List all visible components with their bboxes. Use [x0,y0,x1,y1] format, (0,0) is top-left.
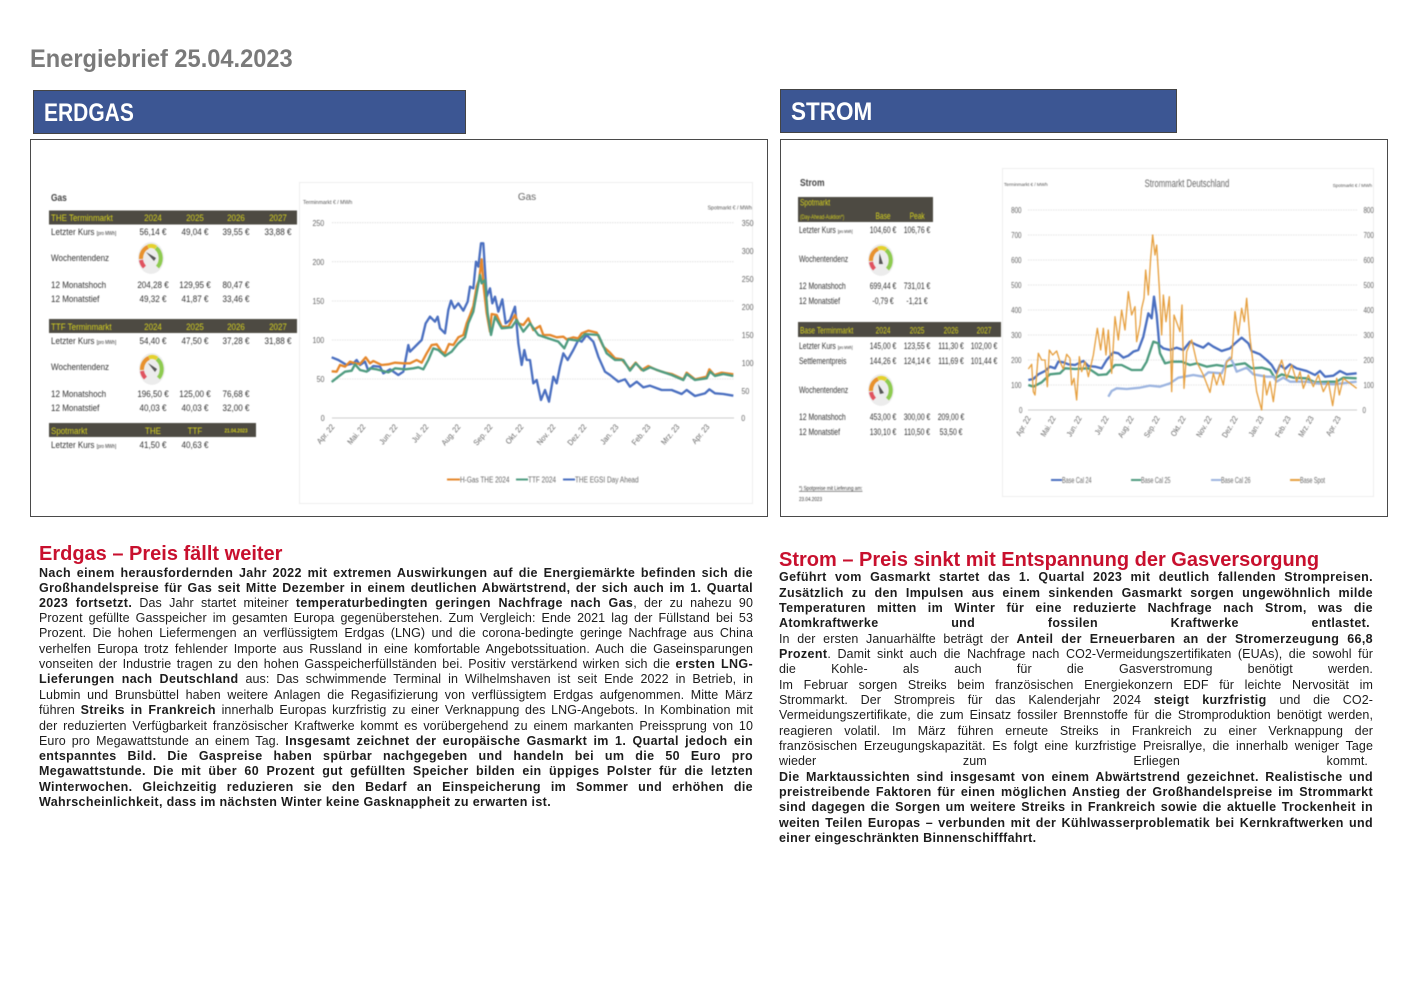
axis labels: 200 [742,303,754,312]
rows: Spotmarkt: 106,76 € [904,225,931,235]
table header: Base Terminmarkt: 2024 [876,325,891,336]
table header: Spotmarkt: (Day-Ahead-Auktion*) [800,214,844,221]
text block: Strom: französischen Erzeugungskapazität. Es folgt eine kurzfristige Preisrallye, die innerhalb weniger Tage [779,739,1373,753]
rows: Base Terminmarkt: Wochentendenz [799,385,848,395]
rows: THE: 39,55 € [223,226,250,237]
axis labels: Nov. 22 [535,422,558,447]
table header: Base Terminmarkt: 2025 [910,325,925,336]
text block: Erdgas: Großhandelspreise für Gas seit Mitte Dezember in einem deutlichen Abwärtstrend, der sich auch im 1. Quartal [39,581,753,595]
line chart: Gas: Gas [518,192,536,203]
icon: gauge Base [868,374,894,406]
footnote: 23.04.2023 [799,497,822,503]
rows: Spotmarkt: -0,79 € [872,296,894,306]
axis labels: 100 [1011,381,1022,390]
rows: Base Terminmarkt: 130,10 € [870,427,897,437]
rows: TTF: 12 Monatshoch [51,388,106,399]
rows: Spotmarkt [51,439,209,450]
table header: TTF Terminmarkt [49,319,297,333]
axis labels: 250 [312,219,324,228]
rows: Spotmarkt: 40,63 € [182,439,209,450]
table header: THE Terminmarkt: 2024 [144,212,162,223]
rows: Spotmarkt: Wochentendenz [799,254,848,264]
rows: TTF: 12 Monatstief [51,402,100,413]
footnote [799,486,862,503]
axis labels: Jul. 22 [1092,414,1111,436]
rows: TTF: 32,00 € [223,402,250,413]
table: Strom: Strom [800,177,825,188]
legend: Strom [1051,477,1325,485]
rows: TTF: 40,03 € [182,402,209,413]
axis labels: 800 [1363,206,1374,215]
rows: TTF: 47,50 € [182,335,209,346]
axis labels [312,219,754,447]
rows: THE: 56,14 € [140,226,167,237]
axis labels: Apr. 22 [1014,414,1033,438]
text block: Strom: In der ersten Januarhälfte beträgt der Anteil der Erneuerbaren an der Stromerzeugung 66,8 [779,632,1373,646]
axis labels: Sep. 22 [471,422,495,447]
axis labels: Apr. 23 [1324,414,1343,438]
rows: THE: 33,46 € [223,293,250,304]
text block: Strom: Strommarkt. Der Strompreis für das Kalenderjahr 2024 steigt kurzfristig und die CO2- [779,693,1373,707]
axis labels: 50 [317,375,324,384]
legend: Gas: TTF 2024 [528,475,556,485]
line chart: Gas [300,182,754,504]
text block: Erdgas: Prozent. Die hohen Liefermengen an verflüssigtem Erdgas (LNG) und die corona-bedingte geringe Nachfrage aus China [39,626,753,640]
legend: Gas: THE EGSI Day Ahead [575,475,639,485]
text block: Erdgas: Lubmin und Brunsbüttel haben weitere Anlagen die Regasifizierung von verflüssigtem Erdgas aufgenommen. Mitte März [39,688,753,702]
heading: Erdgas: Erdgas – Preis fällt weiter [39,543,282,565]
axis labels: 400 [1363,306,1374,315]
rows: Spotmarkt: -1,21 € [906,296,928,306]
rows: Spotmarkt: 731,01 € [904,281,931,291]
table header: Base Terminmarkt: 2026 [944,325,959,336]
text block: Erdgas: Nach einem herausfordernden Jahr 2022 mit extremen Auswirkungen auf die Energiemärkte befinden sich die [39,566,753,580]
rows: THE: 49,32 € [140,293,167,304]
table header: Spotmarkt: THE [145,425,161,436]
axis labels: Mrz. 23 [1296,414,1316,439]
axis labels: Mai. 22 [345,422,368,446]
axis labels: 100 [742,359,754,368]
legend: Strom: Base Cal 26 [1221,477,1251,485]
rows: THE: 49,04 € [182,226,209,237]
line chart: Gas: Terminmarkt € / MWh [303,200,352,206]
axis labels: 400 [1011,306,1022,315]
axis labels: 0 [321,414,325,423]
axis labels: Jun. 22 [377,422,400,446]
text block: Erdgas: entspanntes Bild. Die Gaspreise haben spürbar nachgegeben und handeln bei um die 50 Euro pro [39,749,753,763]
axis labels: Dez. 22 [565,422,589,447]
axis labels: 250 [742,275,754,284]
table: Strom [798,177,1001,503]
axis labels: 600 [1363,256,1374,265]
rows: TTF: Wochentendenz [51,361,109,372]
text block: Strom: sind dagegen die Sorgen um weitere Streiks in Frankreich sowie die aktuelle Trockenheit in [779,800,1373,814]
rows: THE: 129,95 € [179,279,211,290]
table header: Base Terminmarkt: 2027 [977,325,992,336]
text block: Strom: Zusätzlich zu den Impulsen aus einem sinkenden Gasmarkt sorgen ungewöhnlich milde [779,586,1373,600]
icon: gauge TTF [139,353,165,385]
rows: THE: 12 Monatstief [51,293,100,304]
line chart: Gas: Spotmarkt € / MWh [708,206,752,212]
text block: Erdgas: der reduzierten Verfügbarkeit französischer Kraftwerke kommt es vorübergehend zu einem markanten Preissprung von 10 [39,719,753,733]
axis labels: Apr. 22 [315,422,337,446]
text block: Erdgas [39,566,753,809]
rows: Base Terminmarkt: 12 Monatstief [799,427,841,437]
axis labels: Jul. 22 [410,422,431,445]
rows: TTF: 37,28 € [223,335,250,346]
text block: Erdgas: führen Streiks in Frankreich innerhalb Europas kurzfristig zu einer Verknappung des LNG-Angebots. In Kombination mit [39,703,753,717]
axis labels: 300 [742,247,754,256]
rows: Base Terminmarkt: 144,26 € [870,356,897,366]
legend: Gas: H-Gas THE 2024 [460,475,509,485]
rows: Spotmarkt: 104,60 € [870,225,897,235]
axis labels: 800 [1011,206,1022,215]
icon: gauge THE [138,242,164,274]
rows: THE [51,226,292,304]
table header: THE Terminmarkt: 2027 [269,212,287,223]
table header: THE Terminmarkt: 2025 [186,212,204,223]
table: Gas [49,192,297,450]
text block: Strom: Die Marktaussichten sind insgesamt von einem Abwärtstrend gezeichnet. Realistische und [779,770,1373,784]
data lines: Strom [1028,235,1357,410]
footnote: *) Spotpreise mit Lieferung am: [799,486,862,492]
rows: Base Terminmarkt: 124,14 € [904,356,931,366]
text block: Erdgas: verhelfen Europa trotz fehlender Importe aus Russland in eine komfortable Angebotssituation. Auch die Gaseinsparungen [39,642,753,656]
text block: Strom: wieder zum Erliegen kommt. [779,754,1368,768]
rows: Spotmarkt: 41,50 € [140,439,167,450]
axis labels: 0 [1019,406,1023,415]
table header: TTF Terminmarkt: 2024 [144,321,162,332]
axis labels: 600 [1011,256,1022,265]
axis labels: 150 [742,331,754,340]
axis labels: Aug. 22 [439,422,463,447]
axis labels: 200 [1011,356,1022,365]
rows: TTF: 31,88 € [265,335,292,346]
axis labels: 100 [312,336,324,345]
axis labels: Nov. 22 [1194,414,1214,439]
axis labels: Jan. 23 [598,422,621,446]
rows: Base Terminmarkt: 145,00 € [870,341,897,351]
text block: Erdgas: Megawattstunde. Die mit über 60 Prozent gut gefüllten Speicher bilden ein üppiges Polster für die letzten [39,764,753,778]
panel: Strom data [780,139,1388,517]
rows: TTF: 76,68 € [223,388,250,399]
axis labels: 100 [1363,381,1374,390]
text block: Strom: Temperaturen mitten im Winter für eine reduzierte Nachfrage nach Strom, was die [779,601,1373,615]
rows: Base Terminmarkt: 300,00 € [904,412,931,422]
axis labels: 700 [1363,231,1374,240]
text block: Strom: Geführt vom Gasmarkt startet das 1. Quartal 2023 mit deutlich fallenden Strompreisen. [779,570,1373,584]
rows: Spotmarkt: Letzter Kurs [pro MWh] [51,439,116,450]
line chart: Strom: Spotmarkt € / MWh [1333,183,1372,188]
axis labels: 700 [1011,231,1022,240]
axis labels: Feb. 23 [1273,414,1293,439]
table header: THE Terminmarkt [49,210,297,224]
text block: Erdgas: vonseiten der Industrie tragen zu den hohen Gasspeicherfüllständen bei. Positiv verstärkend wirken sich die ersten LNG- [39,657,753,671]
text block: Strom: reagieren volatil. Im März führen erneute Streiks in Frankreich zu einer Verknappung der [779,724,1373,738]
table header: Base Terminmarkt: Base Terminmarkt [800,325,854,336]
line chart: Strom: Terminmarkt € / MWh [1004,182,1048,187]
axis labels: 50 [742,387,749,396]
axis labels: Aug. 22 [1116,414,1136,439]
rows: Spotmarkt: 699,44 € [870,281,897,291]
axis labels: Dez. 22 [1220,414,1240,439]
text block: Strom: die Kohle- als auch für die Gasverstromung benötigt werden. [779,662,1373,676]
table header: TTF Terminmarkt: 2026 [227,321,245,332]
text block: Erdgas: Winterwochen. Gleichzeitig reduzieren sie den Bedarf an Einspeicherung im Sommer und erhöhen die [39,780,753,794]
text block: Strom: preistreibende Faktoren für einen möglichen Anstieg der Großhandelspreise im Strommarkt [779,785,1373,799]
rows: TTF: 196,50 € [137,388,169,399]
rows: TTF: 54,40 € [140,335,167,346]
legend: Gas [447,475,639,485]
rows: THE: 12 Monatshoch [51,279,106,290]
rows: Base Terminmarkt [799,341,998,437]
axis labels: Jun. 22 [1064,414,1084,438]
rows: Spotmarkt: 12 Monatshoch [799,281,846,291]
rows: TTF: 40,03 € [140,402,167,413]
table header: Spotmarkt: Spotmarkt [800,197,831,208]
rows: TTF [51,335,292,413]
axis labels: Okt. 22 [1169,414,1188,438]
table header: TTF Terminmarkt: 2025 [186,321,204,332]
data lines: Gas [332,243,733,402]
axis labels: Feb. 23 [630,422,653,447]
rows: Base Terminmarkt: Letzter Kurs [pro MWh] [799,341,853,351]
text block: Erdgas: Prozent gefüllte Gasspeicher im gesamten Europa gegenüberstehen. Zum Vergleich: Ende 2021 lag der Füllstand bei 53 [39,611,753,625]
axis labels: 0 [1362,406,1366,415]
legend: Strom: Base Cal 25 [1141,477,1171,485]
rows: THE: Letzter Kurs [pro MWh] [51,226,116,237]
rows: Base Terminmarkt: Settlementpreis [799,356,846,366]
table header: TTF Terminmarkt: 2027 [269,321,287,332]
axis labels: Apr. 23 [690,422,712,446]
text block: Strom: Atomkraftwerke und fossilen Kraftwerke entlastet. [779,616,1370,630]
rows: Base Terminmarkt: 12 Monatshoch [799,412,846,422]
banner: Erdgas [33,90,466,134]
rows: Base Terminmarkt: 110,50 € [904,427,930,437]
axis labels: 200 [1363,356,1374,365]
rows: THE: 41,87 € [182,293,209,304]
rows: Base Terminmarkt: 53,50 € [940,427,963,437]
heading: Strom: Strom – Preis sinkt mit Entspannung der Gasversorgung [779,549,1319,571]
text block: Erdgas: Euro pro Megawattstunde an einem Tag. Insgesamt zeichnet der europäische Gasmarkt im 1. Quartal jedoch ein [39,734,753,748]
axis labels: Mai. 22 [1038,414,1058,438]
rows: Base Terminmarkt: 102,00 € [971,341,998,351]
table header: Spotmarkt: Base [876,211,891,221]
rows: THE: 80,47 € [223,279,250,290]
table header: Base Terminmarkt [798,322,1001,337]
banner: Erdgas: ERDGAS [44,99,134,127]
rows: Base Terminmarkt: 101,44 € [971,356,998,366]
rows: THE: Wochentendenz [51,252,109,263]
axis labels: 0 [741,414,745,423]
text block: Erdgas: 2023 fortsetzt. Das Jahr startet miteiner temperaturbedingten geringen Nachfrage nach Gas, der zu nahezu 90 [39,596,753,610]
rows: Base Terminmarkt: 111,69 € [938,356,964,366]
line chart: Strom [1002,168,1374,496]
axis labels: 200 [312,258,324,267]
rows: Base Terminmarkt: 123,55 € [904,341,931,351]
rows: Base Terminmarkt: 209,00 € [938,412,965,422]
rows: THE: 33,88 € [265,226,292,237]
axis labels: 350 [742,219,754,228]
axis labels: Okt. 22 [503,422,526,446]
line chart: Strom: Strommarkt Deutschland [1145,178,1229,190]
axis labels: 150 [312,297,324,306]
table: Gas: Gas [51,192,67,203]
banner: Strom: STROM [791,98,872,126]
rows: Spotmarkt: Letzter Kurs [pro MWh] [799,225,853,235]
table header: TTF Terminmarkt: TTF Terminmarkt [51,321,112,332]
rows: THE: 204,28 € [137,279,169,290]
rows: Spotmarkt: 12 Monatstief [799,296,841,306]
text block: Strom: einer eingeschränkten Binnenschifffahrt. [779,831,1037,845]
table header: THE Terminmarkt: THE Terminmarkt [51,212,113,223]
text block: Strom: Prozent. Damit sinkt auch die Nachfrage nach CO2-Vermeidungszertifikaten (EUAs), die sowohl für [779,647,1373,661]
axis labels: Mrz. 23 [659,422,682,447]
banner: Strom [780,89,1177,133]
text block: Strom [779,570,1373,845]
axis labels [1011,206,1374,439]
table header: Spotmarkt: Peak [910,211,925,221]
axis labels: 300 [1363,331,1374,340]
legend: Strom: Base Cal 24 [1062,477,1092,485]
table header: Spotmarkt: TTF [188,425,202,436]
text block: Strom: Im Februar sorgen Streiks beim französischen Energiekonzern EDF für leichte Nervosität im [779,678,1373,692]
axis labels: Jan. 23 [1246,414,1266,438]
text block: Strom: weiten Teilen Europas – verbunden mit der Kühlwasserproblematik bei Kernkraftwerken und [779,816,1373,830]
rows: Spotmarkt [799,225,931,306]
table header: Spotmarkt [798,197,933,222]
rows: Base Terminmarkt: 111,30 € [938,341,964,351]
axis labels: Sep. 22 [1142,414,1162,439]
panel: Erdgas data [30,139,768,517]
axis labels: 300 [1011,331,1022,340]
icon: gauge Spot [868,244,894,276]
table header: Spotmarkt: 21.04.2023 [224,428,248,435]
legend: Strom: Base Spot [1300,477,1325,485]
axis labels: 500 [1363,281,1374,290]
rows: TTF: 125,00 € [179,388,211,399]
table header: Spotmarkt [49,423,256,437]
text block: Erdgas: Wahrscheinlichkeit, dass im nächsten Winter keine Gasknappheit zu erwarten ist. [39,795,551,809]
table header: THE Terminmarkt: 2026 [227,212,245,223]
text block: Strom: Vermeidungszertifikate, die zum Einsatz fossiler Brennstoffe für die Stromproduktion benötigt werden, [779,708,1373,722]
table header: Spotmarkt: Spotmarkt [51,425,88,436]
title: Energiebrief 25.04.2023 [30,45,293,73]
rows: TTF: Letzter Kurs [pro MWh] [51,335,116,346]
text block: Erdgas: Lieferungen nach Deutschland aus: Das schwimmende Terminal in Wilhelmshaven ist seit Ende 2022 in Betrieb, in [39,672,753,686]
axis labels: 500 [1011,281,1022,290]
rows: Base Terminmarkt: 453,00 € [870,412,897,422]
